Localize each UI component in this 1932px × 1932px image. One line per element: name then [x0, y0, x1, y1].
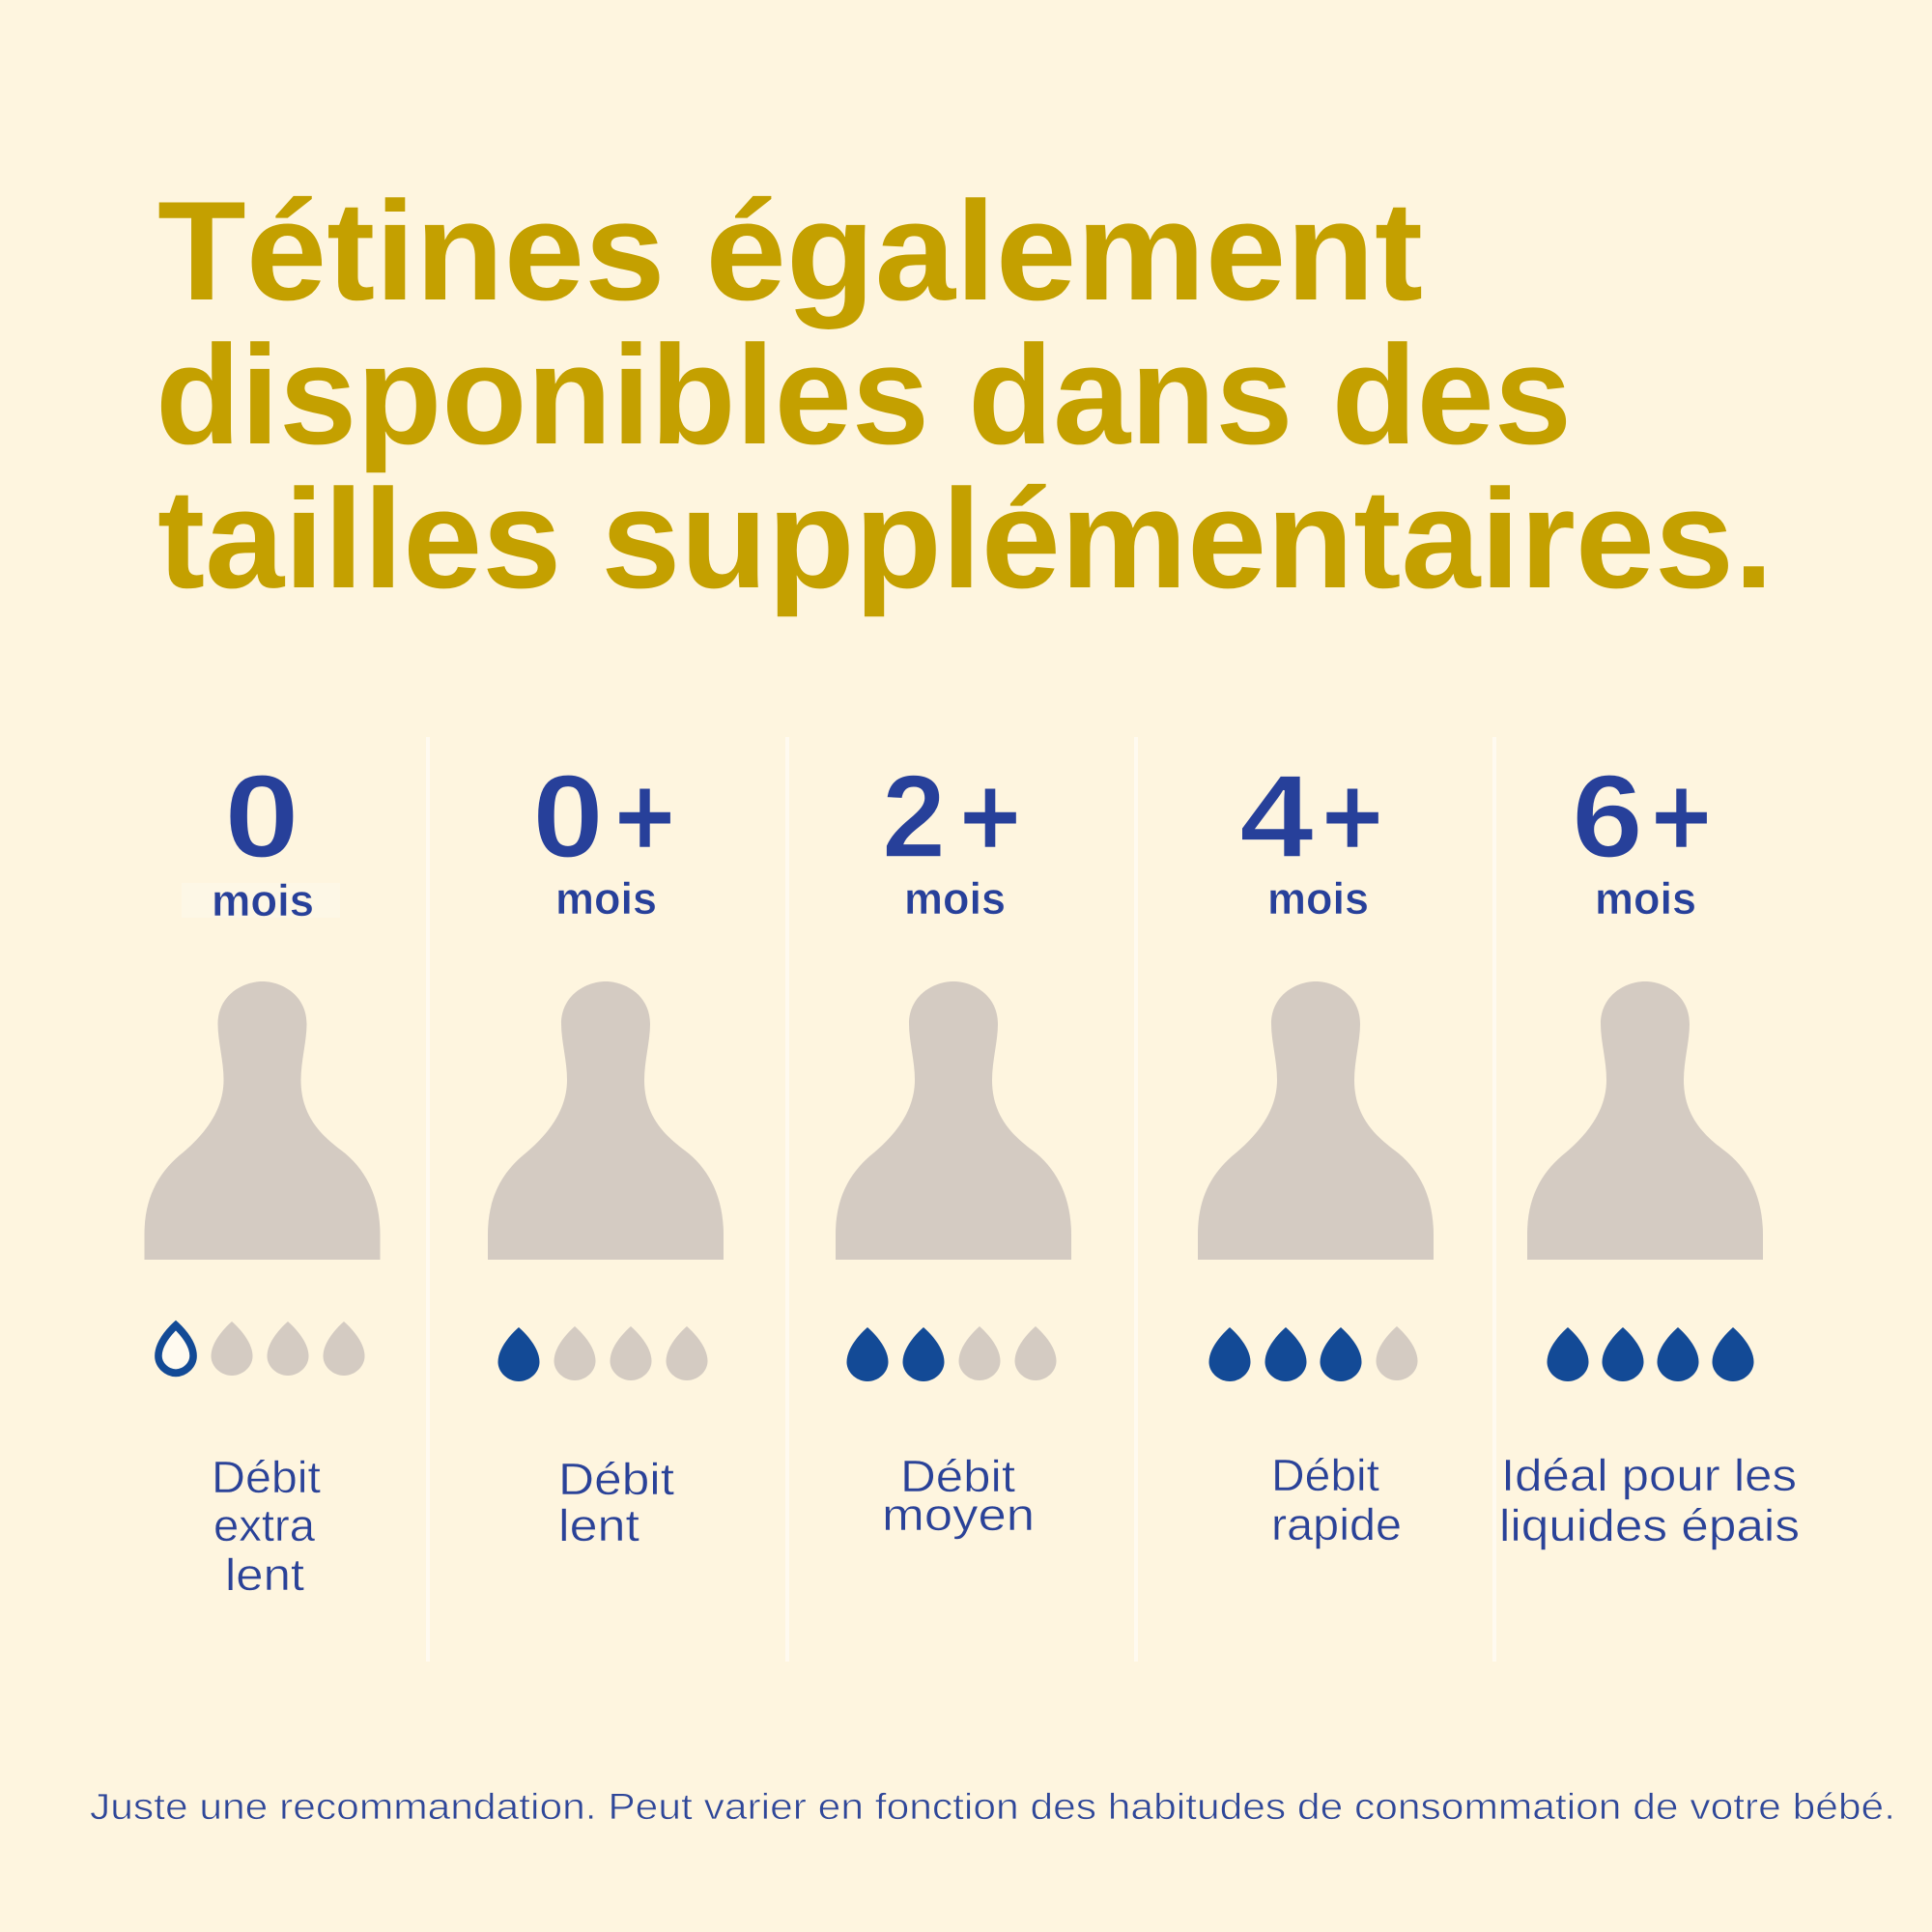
flow label: slow: Débit: [558, 1454, 674, 1504]
icon: teat: [488, 981, 724, 1260]
icon: teat: [1527, 981, 1763, 1260]
icon: teat: [1198, 981, 1434, 1260]
flow label: fast: [1271, 1450, 1402, 1549]
icon: flow drops, two filled: [846, 1326, 1057, 1381]
age label: 0 mois: [182, 751, 340, 925]
title: [156, 172, 1774, 617]
age label: 2+ mois: [882, 751, 1021, 923]
age label: 2+ mois: 2: [882, 751, 946, 882]
flow label: thick liquids: Idéal pour les: [1501, 1450, 1797, 1500]
panel: 2+ mois: [836, 751, 1071, 1540]
age label: 6+ mois: +: [1651, 751, 1712, 882]
age label: 0 mois: 0: [224, 751, 299, 882]
flow label: thick liquids: liquides épais: [1499, 1500, 1800, 1550]
flow label: thick liquids: [1499, 1450, 1800, 1550]
panel: 0 mois: [145, 751, 381, 1600]
age label: 0 mois: mois: [212, 875, 314, 925]
flow label: extra slow: Débit: [212, 1452, 321, 1502]
icon: teat: [836, 981, 1071, 1260]
age label: 6+ mois: mois: [1595, 873, 1696, 923]
age label: 6+ mois: 6: [1572, 751, 1643, 882]
flow label: extra slow: [212, 1452, 321, 1600]
icon: flow drops, one outlined: [158, 1321, 365, 1376]
panel: 6+ mois: [1499, 751, 1800, 1550]
flow label: fast: Débit: [1271, 1450, 1379, 1500]
icon: flow drops, one filled: [498, 1326, 707, 1381]
flow label: medium: Débit: [900, 1451, 1015, 1501]
flow label: slow: [558, 1454, 674, 1550]
flow label: extra slow: lent: [225, 1549, 304, 1600]
age label: 0+ mois: +: [614, 751, 675, 882]
age label: 4+ mois: mois: [1267, 873, 1369, 923]
flow label: extra slow: extra: [213, 1500, 315, 1550]
age label: 4+ mois: +: [1321, 751, 1383, 882]
panel: 0+ mois: [488, 751, 724, 1550]
age label: 0+ mois: [532, 751, 675, 923]
age label: 4+ mois: 4: [1239, 751, 1314, 882]
age label: 0+ mois: 0: [532, 751, 604, 882]
age label: 4+ mois: [1239, 751, 1383, 923]
age label: 0+ mois: mois: [555, 873, 657, 923]
age label: 2+ mois: +: [959, 751, 1021, 882]
title: Tétines également: [157, 172, 1423, 329]
title: disponibles dans des: [156, 316, 1572, 473]
icon: flow drops, four filled: [1548, 1327, 1754, 1381]
age label: 2+ mois: mois: [904, 873, 1006, 923]
flow label: slow: lent: [558, 1500, 639, 1550]
icon: flow drops, three filled: [1209, 1326, 1418, 1381]
flow label: medium: [882, 1451, 1035, 1540]
flow label: medium: moyen: [882, 1490, 1035, 1540]
footnote: Juste une recommandation. Peut varier en fonction des habitudes de consommation de votre bébé.: [90, 1787, 1895, 1828]
flow label: fast: rapide: [1271, 1499, 1402, 1549]
panel: 4+ mois: [1198, 751, 1434, 1549]
icon: teat: [145, 981, 381, 1260]
title: tailles supplémentaires.: [157, 460, 1774, 617]
age label: 6+ mois: [1572, 751, 1712, 923]
